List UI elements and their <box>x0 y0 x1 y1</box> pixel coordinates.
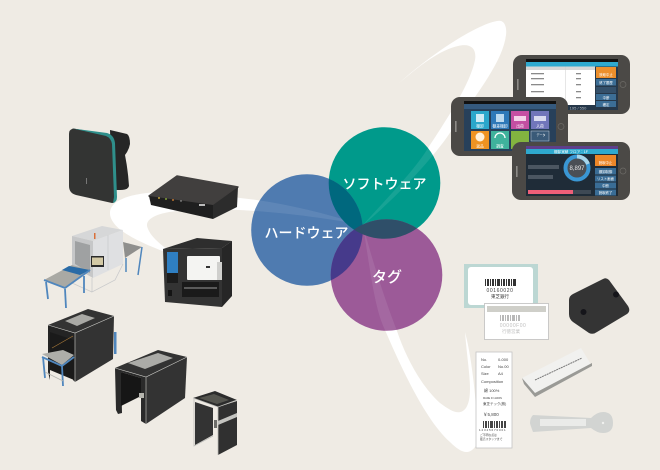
progress ring: 8,897 <box>569 166 585 172</box>
label: software: ソフトウェア <box>342 176 426 192</box>
overlap: software and tag <box>354 219 417 239</box>
panel: hardware devices <box>42 128 238 455</box>
phone: inventory list <box>513 55 630 114</box>
conveyor scanner <box>44 226 142 308</box>
phone: progress screen <box>512 142 630 200</box>
metal on-tag <box>522 348 592 397</box>
phone: inventory list: 195 / 550 <box>570 106 587 110</box>
garment label tag: 販売スタッフまで <box>480 437 503 441</box>
phone: progress screen: リスト画面 <box>597 176 615 181</box>
card tag: office: 行徳営業 <box>502 328 520 335</box>
garment label tag <box>476 352 512 448</box>
swoosh seen through circles <box>255 148 433 330</box>
barcode <box>483 421 506 428</box>
garment label tag: Size <box>481 371 490 376</box>
phone: main menu <box>451 97 568 156</box>
menu tiles: データ <box>536 132 546 137</box>
phone: progress screen: 読取終了 <box>599 190 612 195</box>
transparent tag <box>530 412 613 433</box>
garment label tag: 1 2 3 4 5 6 7 0 0 0 1 <box>479 428 506 432</box>
tunnel reader with conveyor <box>42 309 116 386</box>
tunnel reader <box>115 350 187 424</box>
garment label tag: Color <box>481 364 491 369</box>
phone: inventory list: 中断 <box>603 95 610 100</box>
phone: progress screen: 中断 <box>602 183 609 188</box>
garment label tag: 0-000 <box>498 357 509 362</box>
menu tiles: 棚卸 <box>476 124 484 128</box>
garment label tag: 綿 100% <box>484 387 500 393</box>
venn diagram <box>251 127 442 331</box>
phone: inventory list: 終了履歴 <box>599 80 613 85</box>
garment label tag: No. <box>481 357 487 362</box>
circle: hardware <box>251 174 363 286</box>
label: hardware: ハードウェア <box>264 225 348 241</box>
menu tiles: 入荷 <box>536 124 544 128</box>
menu tiles: 出荷 <box>516 124 524 128</box>
menu tiles: 調査 <box>496 144 504 148</box>
garment label tag: ご不明な点は <box>480 433 497 437</box>
garment label tag: ￥5,800 <box>483 412 499 417</box>
circle: tag <box>331 219 442 331</box>
card tag: bank <box>464 264 538 308</box>
network router <box>149 176 238 219</box>
overlap: hardware and tag <box>330 224 363 280</box>
barcode <box>485 279 516 286</box>
garment label tag: Composition <box>481 379 503 384</box>
card tag: bank: 00160020 <box>486 288 514 294</box>
menu tiles <box>471 111 549 149</box>
card tag: office: 00000F00 <box>500 323 526 329</box>
label: tag: タグ <box>372 269 402 286</box>
garment label tag: MADE IN JAPAN <box>483 397 502 400</box>
garment label tag: A4 <box>498 371 504 376</box>
panel: software phones <box>451 55 630 200</box>
label printer <box>163 238 232 307</box>
menu tiles: 返品 <box>476 144 484 148</box>
white orbit swoosh <box>110 21 506 452</box>
phone: inventory list: 読取中止 <box>599 72 613 77</box>
garment label tag: 東芝テック(株) <box>483 401 506 406</box>
phone: progress screen: 読取中止 <box>599 160 613 165</box>
overlap: software and hardware <box>328 178 362 230</box>
phone: progress screen: 棚卸実績 フロア：1F <box>554 149 589 154</box>
card tag: bank: 東芝銀行 <box>491 293 509 300</box>
card tag: office <box>484 304 548 340</box>
handheld reader <box>69 128 130 203</box>
gate reader <box>193 391 237 455</box>
phone: progress screen: 棚卸制御 <box>599 169 613 174</box>
circle: software <box>329 127 440 239</box>
garment label tag: No.00 <box>498 364 509 369</box>
panel: tags <box>464 264 629 448</box>
phone: inventory list: 確定 <box>603 102 610 107</box>
hard black tag <box>569 278 629 334</box>
menu tiles: 棚差棚卸 <box>492 124 508 128</box>
